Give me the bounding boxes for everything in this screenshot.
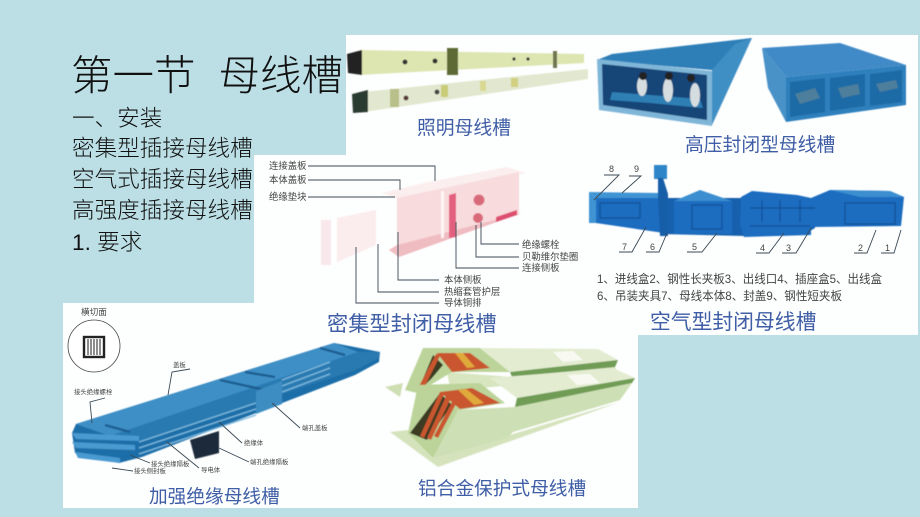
caption: 加强绝缘母线槽 xyxy=(149,486,280,507)
part labels: 盖板 xyxy=(173,360,186,369)
illustration: enclosures xyxy=(597,38,906,126)
part labels: 绝缘螺栓 xyxy=(522,239,560,250)
part labels: 绝缘垫块 xyxy=(269,191,307,202)
part labels: 端孔盖板 xyxy=(302,423,328,432)
caption: 空气型封闭母线槽 xyxy=(650,311,816,334)
caption: 密集型封闭母线槽 xyxy=(327,312,497,336)
caption: 照明母线槽 xyxy=(417,117,511,138)
panel: aluminium alloy protected busway xyxy=(385,348,635,499)
text block: installation list: 一、安装 xyxy=(72,106,162,131)
part numbers: 1 xyxy=(885,243,890,253)
part labels: 绝缘体 xyxy=(244,438,264,447)
illustration: blue busway xyxy=(589,165,904,237)
leader lines xyxy=(90,369,300,471)
part numbers: 9 xyxy=(634,164,639,174)
legend text: 1、进线盒2、钢性长夹板3、出线口4、插座盒5、出线盒 xyxy=(597,272,882,286)
part numbers: 4 xyxy=(760,243,765,253)
legend text: 6、吊装夹具7、母线本体8、封盖9、钢性短夹板 xyxy=(597,289,842,303)
title: 第一节 母线槽 xyxy=(71,52,343,99)
part labels: 接头绝缘螺栓 xyxy=(74,387,113,396)
part numbers: 3 xyxy=(786,243,791,253)
part numbers xyxy=(609,164,890,253)
panel: air enclosed busway xyxy=(589,164,904,334)
part labels: 接头侧封板 xyxy=(134,466,167,475)
part numbers: 2 xyxy=(858,243,863,253)
part numbers: 5 xyxy=(692,242,697,252)
text block: installation list: 1. 要求 xyxy=(72,230,142,255)
part labels: 贝勒维尔垫圈 xyxy=(522,251,578,262)
cross-section inset: 横切面 xyxy=(81,306,107,317)
illustration: pink busway xyxy=(321,167,526,265)
cross-section inset xyxy=(68,306,120,372)
part labels: 连接盖板 xyxy=(269,160,307,171)
part numbers: 6 xyxy=(650,242,655,252)
text block: installation list: 高强度插接母线槽 xyxy=(72,198,253,223)
part numbers: 8 xyxy=(609,164,614,174)
illustration: green busway xyxy=(385,348,635,467)
number leaders xyxy=(594,175,901,253)
part labels: 热缩套管护层 xyxy=(444,286,500,297)
part labels: 本体侧板 xyxy=(444,274,482,285)
text block: installation list: 密集型插接母线槽 xyxy=(72,136,253,161)
illustration: lighting rails xyxy=(347,48,588,113)
part labels xyxy=(74,360,328,475)
caption: 高压封闭型母线槽 xyxy=(685,134,835,155)
legend text xyxy=(597,272,882,303)
panel: high-voltage enclosed busway xyxy=(597,38,906,155)
panel: reinforced insulated busway xyxy=(68,306,380,507)
caption: 铝合金保护式母线槽 xyxy=(418,478,586,499)
part labels: 本体盖板 xyxy=(269,174,307,185)
part labels xyxy=(269,160,578,308)
text block: installation list xyxy=(72,106,253,255)
part labels: 连接侧板 xyxy=(522,262,560,273)
text block: installation list: 空气式插接母线槽 xyxy=(72,167,253,192)
part labels: 导体铜排 xyxy=(444,297,482,308)
panel: lighting busway xyxy=(347,48,588,138)
leader lines xyxy=(308,166,519,303)
panel: dense enclosed busway xyxy=(269,160,578,336)
illustration: blue busway xyxy=(72,343,380,463)
part numbers: 7 xyxy=(622,242,627,252)
part labels: 端孔绝缘隔板 xyxy=(250,457,289,466)
part labels: 接头绝缘隔板 xyxy=(151,459,190,468)
part labels: 导电体 xyxy=(201,465,221,474)
